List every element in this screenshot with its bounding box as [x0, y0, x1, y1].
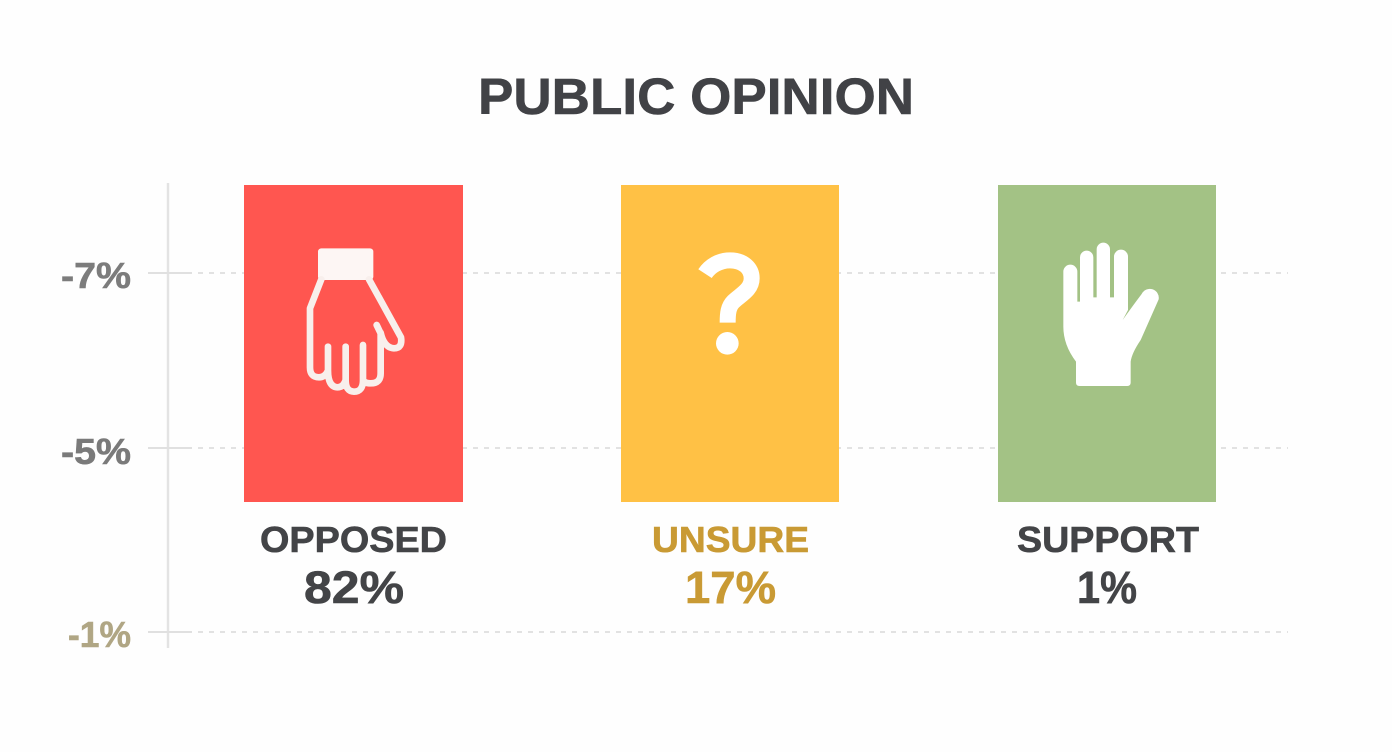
axis label: -7%: -7%: [61, 255, 131, 296]
label: opposed: [260, 519, 447, 613]
icon: question mark: [705, 260, 752, 355]
label: support: [1017, 519, 1199, 613]
label: support: SUPPORT: [1017, 519, 1199, 560]
icon: hand pointing down: [310, 248, 401, 392]
value: 17%: 17%: [685, 562, 776, 613]
bar: support: [998, 185, 1216, 502]
label: unsure: UNSURE: [652, 519, 809, 560]
chart axis and gridlines: [148, 183, 1288, 648]
value: 82%: 82%: [304, 562, 404, 613]
axis label: -1%: -1%: [68, 614, 131, 655]
bar: unsure: [621, 185, 839, 502]
value: 1%: 1%: [1077, 562, 1137, 613]
label: unsure: [652, 519, 809, 613]
label: opposed: OPPOSED: [260, 519, 447, 560]
title: PUBLIC OPINION: [478, 68, 914, 125]
bar: opposed: [244, 185, 463, 502]
axis label: -5%: -5%: [61, 431, 131, 472]
icon: raised hand: [1063, 243, 1159, 386]
